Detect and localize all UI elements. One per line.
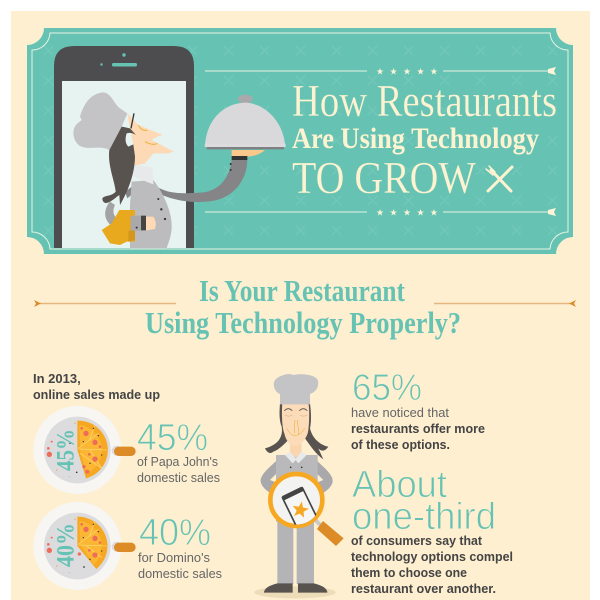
icon: crossed fork and knife xyxy=(486,166,512,191)
stat: 45% Papa John's xyxy=(137,417,220,485)
stat: 65%: 65% xyxy=(352,367,422,408)
title: Are Using Technology xyxy=(292,122,539,155)
text: intro: In 2013, xyxy=(33,371,81,386)
decorative divider: bottom stars: ★★★★★ xyxy=(376,208,438,218)
arrow: left heading rule xyxy=(34,300,176,307)
title xyxy=(292,76,557,203)
stat: about one-third xyxy=(351,464,513,596)
stat: 40% Domino's: 40% xyxy=(139,512,211,554)
chef body xyxy=(254,455,336,598)
stat: about one-third: them to choose one xyxy=(351,565,467,580)
icon: magnifying glass with phone and star xyxy=(270,474,344,546)
stat: 65% xyxy=(351,367,485,452)
decorative divider: top stars xyxy=(205,66,556,76)
icon: smartphone xyxy=(54,46,194,248)
icon: plate with 45% pizza xyxy=(33,406,136,494)
icon: serving arm with cloche xyxy=(155,95,286,202)
text: intro xyxy=(33,371,160,402)
stat: about one-third: of consumers say that xyxy=(351,533,483,548)
icon: plate with 40% pizza xyxy=(33,502,136,590)
stat: about one-third: technology options compel xyxy=(351,549,513,564)
title: How Restaurants xyxy=(292,76,557,126)
decorative divider: top stars: ★★★★★ xyxy=(376,66,438,76)
stat: 40% Domino's: domestic sales xyxy=(138,566,222,581)
illustration: chef with magnifying glass xyxy=(254,374,344,598)
stat: 65%: restaurants offer more xyxy=(351,421,485,436)
illustration: chef in phone xyxy=(73,92,174,248)
heading: section question: Using Technology Properly? xyxy=(145,305,461,340)
title: TO GROW xyxy=(292,152,476,203)
stat: 40% Domino's: for Domino's xyxy=(138,550,210,565)
icon: plate with 40% pizza: 40% xyxy=(52,523,79,567)
stat: 45% Papa John's: domestic sales xyxy=(137,470,220,485)
stat: 40% Domino's xyxy=(138,512,222,581)
stat: 45% Papa John's: of Papa John's xyxy=(137,454,218,469)
chef head xyxy=(265,374,328,468)
text: intro: online sales made up xyxy=(33,387,160,402)
stat: about one-third: restaurant over another. xyxy=(351,581,496,596)
heading: section question xyxy=(145,273,461,340)
stat: about one-third: one-third xyxy=(352,496,496,538)
heading: section question: Is Your Restaurant xyxy=(199,273,406,308)
stat: 45% Papa John's: 45% xyxy=(137,417,208,459)
icon: plate with 45% pizza: 45% xyxy=(52,429,79,471)
stat: 65%: have noticed that xyxy=(351,405,449,420)
stat: about one-third: About xyxy=(352,464,447,506)
panel: banner xyxy=(27,28,573,254)
arrow: right heading rule xyxy=(434,300,576,307)
stat: 65%: of these options. xyxy=(351,437,450,452)
decorative divider: bottom stars xyxy=(205,208,556,218)
